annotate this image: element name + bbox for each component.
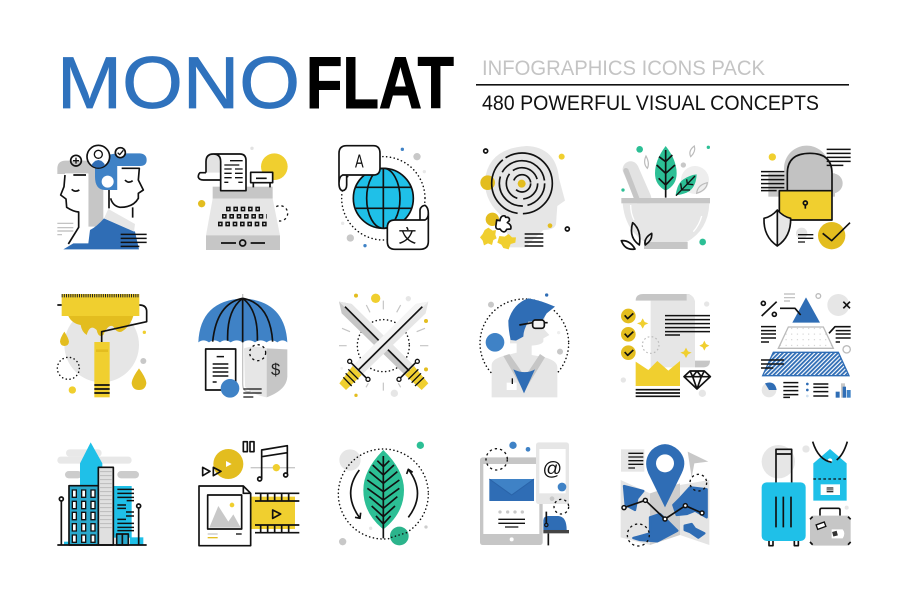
icon: translation globe: 文 (398, 227, 416, 247)
row 1 right icons (480, 146, 851, 249)
row 3 right icons (480, 442, 851, 547)
icon: mortar and herbs (621, 146, 710, 249)
icon: paint roller (57, 294, 147, 397)
icon: typewriter (198, 147, 288, 250)
icon: umbrella insurance: $ (271, 360, 280, 379)
icon: pyramid chart (761, 294, 851, 398)
title: MONO (57, 43, 300, 124)
icon: crossed swords (339, 294, 428, 397)
header rule (476, 84, 849, 86)
icon: media file and music (199, 442, 299, 546)
icon: tablet and phone email: @ (543, 459, 562, 480)
row 1 left icons (57, 145, 428, 250)
icon: businessperson with glasses (480, 293, 569, 400)
icon: map with pin (621, 444, 709, 546)
icon: city buildings (57, 442, 147, 545)
row 2 left icons (57, 294, 428, 398)
subtitle: pack name: INFOGRAPHICS ICONS PACK (482, 56, 766, 80)
row 2 right icons (480, 293, 851, 400)
icon: luggage and tag (762, 442, 851, 546)
title (57, 43, 454, 124)
icon: translation globe: A (355, 151, 364, 172)
subtitle: concepts: 480 POWERFUL VISUAL CONCEPTS (482, 91, 819, 115)
icon: two profiles (57, 145, 147, 249)
icon: head with maze (480, 146, 569, 249)
icon: padlock and shield (761, 146, 851, 249)
icon: tablet and phone email (480, 442, 570, 547)
icon: translation globe (339, 146, 428, 249)
icon: leaf life cycle (338, 442, 428, 545)
icon: document, crown and diamond (621, 294, 710, 397)
title: FLAT (306, 43, 454, 124)
icon: umbrella insurance (198, 294, 287, 398)
row 3 left icons (57, 442, 428, 546)
